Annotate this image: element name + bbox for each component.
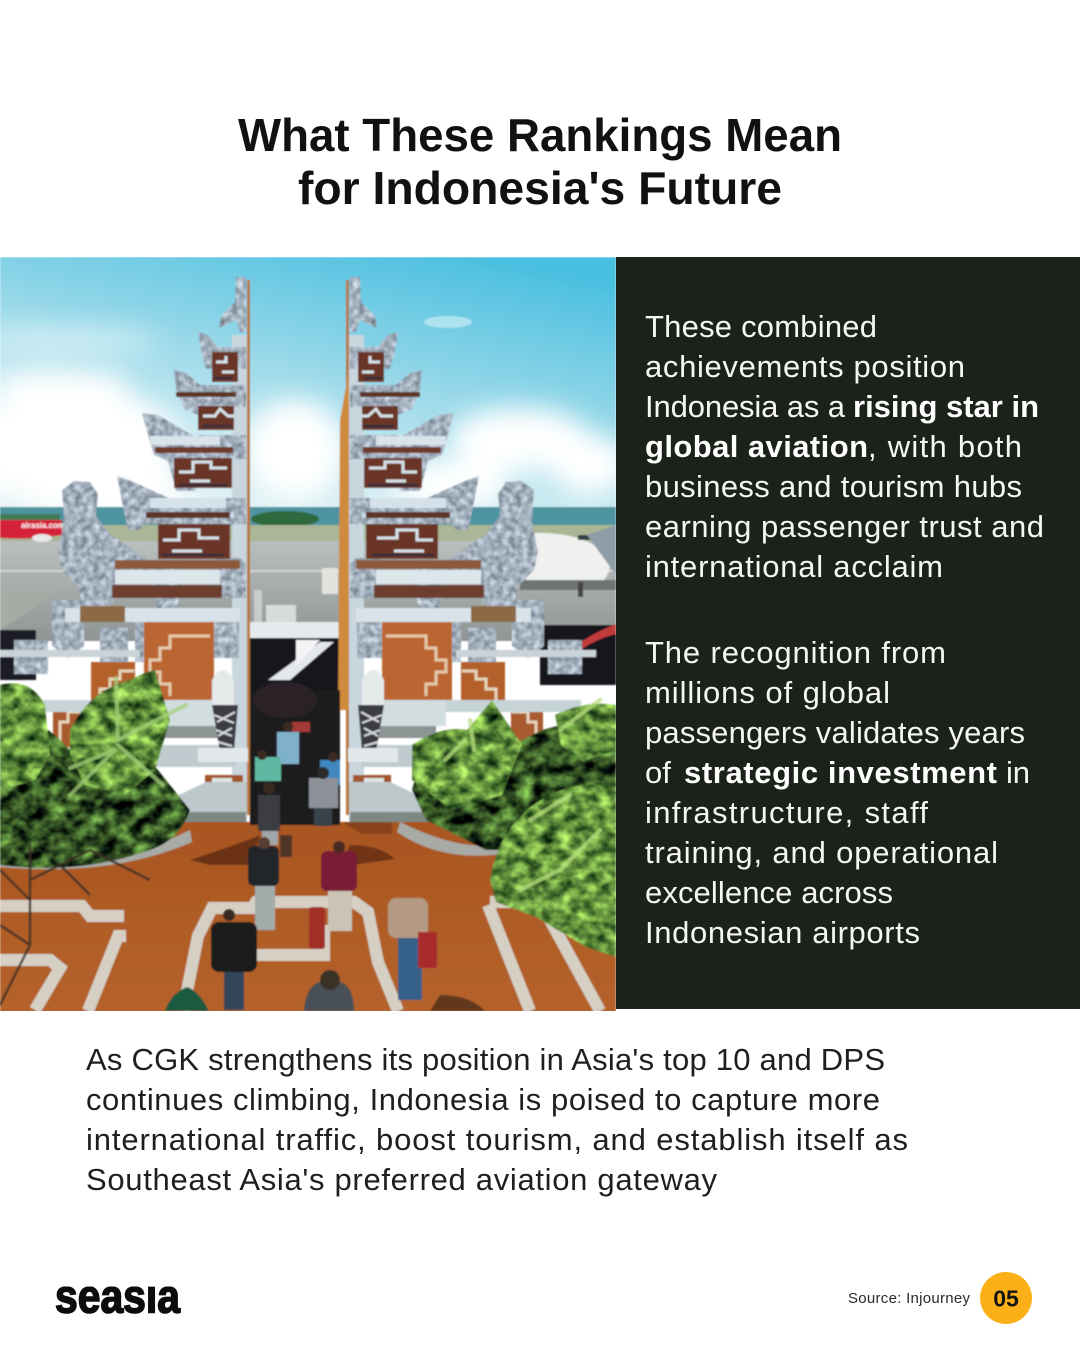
paragraph: rising star [645, 309, 1044, 584]
left gate [0, 277, 250, 822]
paragraph: rising star: global aviation [645, 429, 868, 464]
paragraph: strategic investment [645, 635, 1030, 950]
right gate [346, 277, 596, 822]
man in grey, bottom [304, 981, 354, 1011]
title [238, 109, 842, 214]
right gate orange edge [338, 370, 349, 710]
title: What These Rankings Mean [238, 109, 842, 161]
white plane and jet bridge [518, 525, 616, 597]
sky and clouds [0, 257, 630, 519]
bus between gates [250, 622, 340, 692]
closing paragraph: continues climbing, Indonesia is poised to capture more [86, 1082, 880, 1117]
white paving pattern [0, 902, 616, 1011]
passengers in the doorway [253, 682, 340, 857]
paragraph: strategic investment: training, and operational [645, 835, 998, 870]
right-side dark bus [0, 624, 616, 685]
woman in black [248, 846, 279, 886]
left bare tree [0, 845, 150, 1005]
red airasia plane [0, 520, 65, 542]
paragraph: rising star: achievements position [645, 349, 965, 384]
paragraph: rising star: Indonesia as a [645, 389, 846, 424]
woman in maroon with suitcase [321, 851, 357, 891]
paragraph: strategic investment: The recognition from [645, 635, 946, 670]
paragraph: strategic investment: of [645, 755, 671, 790]
paragraph: rising star: These combined [645, 309, 877, 344]
paragraph: strategic investment: passengers validates years [645, 715, 1025, 750]
paragraph: rising star: earning passenger trust and [645, 509, 1044, 544]
horizon and airfield [0, 507, 616, 641]
green hijab [165, 987, 209, 1011]
dark text panel [616, 257, 1080, 1009]
left planters and foliage [0, 670, 192, 869]
paragraph: rising star: , with both [868, 429, 1022, 464]
passengers on the plaza [165, 837, 437, 1011]
logo: seasia: seasia [55, 1270, 181, 1322]
right planters and foliage [397, 700, 616, 957]
page number badge [980, 1272, 1032, 1324]
paragraph: rising star: international acclaim [645, 549, 943, 584]
paragraph: strategic investment: strategic investment [684, 755, 997, 790]
woman with hijab and red bag [388, 898, 428, 938]
paragraph: strategic investment: infrastructure, staff [645, 795, 928, 830]
red airasia plane: airasia.com [21, 521, 65, 530]
photo: Bali airport split gate [0, 257, 630, 1012]
paragraph: rising star: rising star in [853, 389, 1039, 424]
closing paragraph: international traffic, boost tourism, and establish itself as [86, 1122, 908, 1157]
paragraph: rising star: business and tourism hubs [645, 469, 1022, 504]
ground vehicles [254, 568, 338, 623]
paragraph: strategic investment: Indonesian airports [645, 915, 920, 950]
central walkway in shadow [250, 690, 340, 825]
paragraph: strategic investment: millions of global [645, 675, 890, 710]
closing paragraph: As CGK strengthens its position in Asia's top 10 and DPS [86, 1042, 885, 1077]
brick ground [0, 690, 616, 1012]
closing paragraph: Southeast Asia's preferred aviation gateway [86, 1162, 718, 1197]
title: for Indonesia's Future [298, 162, 782, 214]
paragraph: strategic investment: excellence across [645, 875, 893, 910]
person in dark jacket [211, 922, 257, 972]
closing paragraph [86, 1042, 908, 1197]
paragraph: strategic investment: in [1006, 755, 1030, 790]
source note: Source: Injourney [848, 1290, 970, 1307]
page number badge: 05 [993, 1286, 1019, 1312]
